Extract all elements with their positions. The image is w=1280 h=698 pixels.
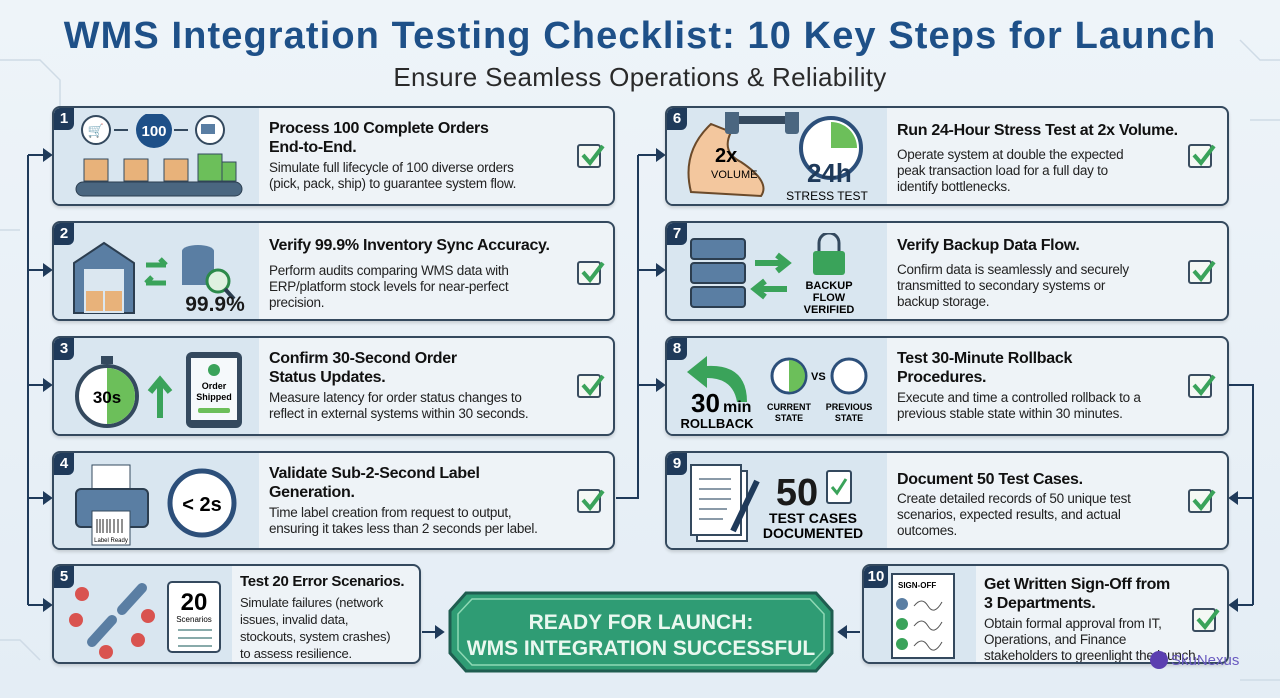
checkbox (1188, 144, 1212, 168)
text 1: Simulate full lifecycle of 100 diverse orders (269, 160, 514, 175)
text 7 (897, 237, 1130, 309)
text 1: Process 100 Complete Orders (269, 120, 489, 137)
text 8: Procedures. (897, 369, 986, 386)
text 2: precision. (269, 295, 324, 310)
text 9: Document 50 Test Cases. (897, 471, 1083, 488)
icon: order flow: 🛒 (88, 123, 104, 138)
icon: 2x volume 24h: 2x (715, 145, 737, 167)
checkbox (1188, 374, 1212, 398)
icon: order flow (76, 114, 242, 196)
icon: rollback: VS (811, 371, 826, 383)
text 2: ERP/platform stock levels for near-perfect (269, 279, 508, 294)
text 5 (240, 573, 404, 661)
checkbox (577, 489, 601, 513)
card 9 (665, 451, 1229, 550)
text 6: Operate system at double the expected (897, 147, 1123, 162)
text 9: outcomes. (897, 523, 957, 538)
text 5: issues, invalid data, (240, 612, 348, 627)
icon: printer and timer: < 2s (182, 494, 222, 516)
icon: backup servers: FLOW (813, 292, 846, 304)
card 7 (665, 221, 1229, 321)
icon: rollback: STATE (775, 413, 803, 423)
text 7: Verify Backup Data Flow. (897, 237, 1080, 254)
checkbox (577, 261, 601, 285)
text 5: Simulate failures (network (240, 595, 383, 610)
text 4: ensuring it takes less than 2 seconds per label. (269, 521, 538, 536)
launch button: READY FOR LAUNCH: (529, 611, 753, 634)
card 8 (665, 336, 1229, 436)
card 6: 6 (673, 110, 681, 127)
text 6: peak transaction load for a full day to (897, 163, 1108, 178)
card 8: 8 (673, 340, 681, 357)
card 5 (52, 564, 421, 664)
icon: documents 50: DOCUMENTED (763, 525, 863, 541)
icon: broken chain and scenarios: 20 (181, 589, 207, 616)
text 5: Test 20 Error Scenarios. (240, 573, 404, 590)
icon: sign-off sheet (891, 573, 955, 659)
checkbox (1192, 608, 1216, 632)
card 2 (52, 221, 615, 321)
text 4: Time label creation from request to output, (269, 505, 511, 520)
card 1: 1 (60, 110, 68, 127)
icon: warehouse sync: 99.9% (185, 293, 245, 316)
icon: 2x volume 24h: VOLUME (711, 169, 757, 181)
text 6: Run 24-Hour Stress Test at 2x Volume. (897, 122, 1178, 139)
launch button (448, 592, 834, 672)
text 7: Confirm data is seamlessly and securely (897, 262, 1129, 277)
card 5: 5 (60, 568, 68, 585)
card 7: 7 (673, 225, 681, 242)
icon: documents 50: TEST CASES (769, 510, 857, 526)
icon: backup servers: BACKUP (805, 280, 853, 292)
text 1: End-to-End. (269, 139, 356, 156)
checkbox (1188, 260, 1212, 284)
icon: broken chain and scenarios (69, 581, 221, 659)
card 6 (665, 106, 1229, 206)
text 8: Test 30-Minute Rollback (897, 350, 1072, 367)
checkbox (577, 144, 601, 168)
text 6: identify bottlenecks. (897, 179, 1010, 194)
text 3: Measure latency for order status changes to (269, 390, 522, 405)
text 8: Execute and time a controlled rollback to a (897, 390, 1141, 405)
icon: rollback: CURRENT (767, 402, 812, 412)
icon: documents 50: 50 (776, 472, 818, 514)
text 2 (269, 237, 550, 310)
text 10: Obtain formal approval from IT, (984, 616, 1162, 631)
logo: SkuNexus: SkuNexus (1171, 652, 1239, 668)
card 1 (52, 106, 615, 206)
text 7: transmitted to secondary systems or (897, 278, 1105, 293)
text 5: to assess resilience. (240, 646, 352, 661)
card 4: 4 (60, 455, 68, 472)
icon: warehouse sync (73, 242, 245, 316)
text 10 (984, 576, 1199, 663)
icon: documents 50 (690, 464, 863, 542)
text 4 (269, 465, 538, 536)
icon: rollback: min (723, 399, 751, 416)
icon: rollback (681, 356, 872, 431)
icon: stopwatch and tablet: 30s (93, 388, 121, 407)
icon: stopwatch and tablet: Order (202, 381, 227, 391)
card 3: 3 (60, 340, 68, 357)
checkbox (1188, 489, 1212, 513)
card 3 (52, 336, 615, 436)
text 9 (897, 471, 1131, 538)
text 7: backup storage. (897, 294, 989, 309)
icon: backup servers (690, 233, 854, 316)
text 3: Status Updates. (269, 369, 385, 386)
icon: broken chain and scenarios: Scenarios (176, 615, 212, 624)
text 3: reflect in external systems within 30 seconds. (269, 406, 528, 421)
text 10: Get Written Sign-Off from (984, 576, 1170, 593)
icon: order flow: 100 (141, 123, 167, 140)
icon: stopwatch and tablet: Shipped (196, 392, 232, 402)
text 6 (897, 122, 1178, 194)
icon: rollback: PREVIOUS (826, 402, 872, 412)
icon: rollback: 30 (691, 388, 720, 418)
icon: rollback: ROLLBACK (681, 416, 754, 431)
icon: stopwatch and tablet (75, 352, 242, 428)
text 2: Perform audits comparing WMS data with (269, 263, 509, 278)
text 10: stakeholders to greenlight the launch. (984, 648, 1199, 663)
text 3: Confirm 30-Second Order (269, 350, 457, 367)
text 9: Create detailed records of 50 unique test (897, 491, 1131, 506)
subtitle: Ensure Seamless Operations & Reliability (393, 62, 887, 92)
text 4: Validate Sub-2-Second Label (269, 465, 480, 482)
card 10: 10 (868, 568, 884, 585)
icon: backup servers: VERIFIED (804, 304, 854, 316)
card 9: 9 (673, 455, 681, 472)
text 8: previous stable state within 30 minutes. (897, 406, 1123, 421)
text 1: (pick, pack, ship) to guarantee system flow. (269, 176, 516, 191)
checkbox (577, 374, 601, 398)
icon: sign-off sheet: SIGN-OFF (898, 581, 936, 590)
launch button: WMS INTEGRATION SUCCESSFUL (467, 637, 815, 660)
text 10: 3 Departments. (984, 595, 1095, 612)
icon: 2x volume 24h (688, 112, 869, 203)
text 3 (269, 350, 528, 421)
text 4: Generation. (269, 484, 355, 501)
icon: printer and timer (75, 464, 236, 546)
card 4 (52, 451, 615, 550)
text 5: stockouts, system crashes) (240, 629, 390, 644)
text 2: Verify 99.9% Inventory Sync Accuracy. (269, 237, 550, 254)
text 8 (897, 350, 1141, 421)
card 10 (862, 564, 1229, 664)
icon: rollback: STATE (835, 413, 863, 423)
icon: 2x volume 24h: 24h (807, 158, 852, 188)
title: WMS Integration Testing Checklist: 10 Key Steps for Launch (64, 15, 1216, 57)
icon: 2x volume 24h: STRESS TEST (786, 189, 869, 203)
icon: printer and timer: Label Ready (94, 538, 128, 544)
text 10: Operations, and Finance (984, 632, 1126, 647)
text 1 (269, 120, 516, 191)
card 2: 2 (60, 225, 68, 242)
text 9: scenarios, expected results, and actual (897, 507, 1121, 522)
